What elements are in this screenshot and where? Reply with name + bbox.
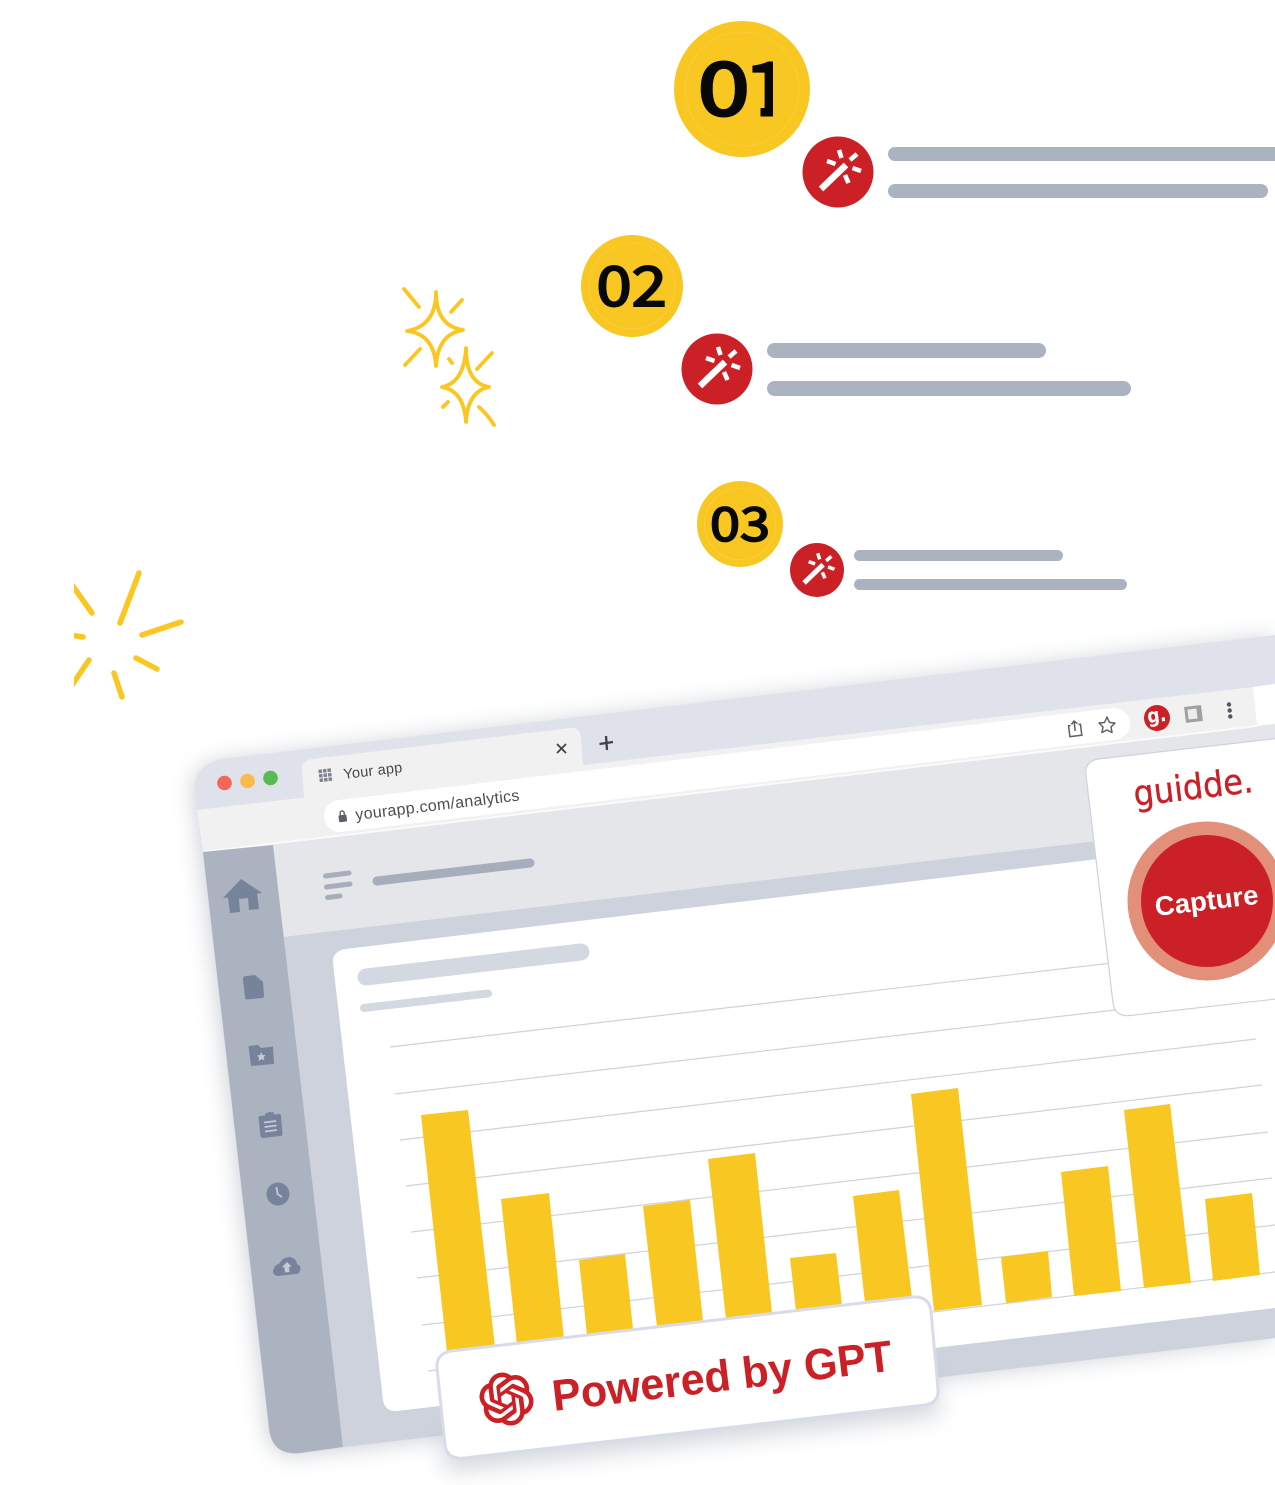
icon: clipboard: [258, 1112, 282, 1138]
icon: cloud upload: [273, 1257, 301, 1276]
active tab: [302, 728, 583, 798]
capture button: [1128, 822, 1275, 980]
icon: clock: [266, 1182, 290, 1206]
icon: bookmark star: [1099, 717, 1115, 732]
sidebar: [203, 845, 343, 1453]
capture button: Capture: [1153, 880, 1260, 922]
text placeholder lines 02: [767, 343, 1131, 396]
guidde logo: guidde.: [1131, 761, 1255, 815]
icon: menu dots: [1227, 702, 1233, 719]
icon: magic wand 03: [790, 543, 844, 597]
number badge 03: [697, 481, 783, 567]
text placeholder lines 01: [888, 147, 1275, 198]
icon: new tab plus: [600, 736, 613, 750]
number badge 03: 03: [710, 486, 770, 555]
address bar: [340, 724, 1114, 816]
browser window: [193, 635, 1275, 1455]
card subtitle placeholder: [364, 994, 488, 1008]
tab title: Your app: [343, 760, 403, 783]
powered by GPT badge: [437, 1297, 940, 1472]
number badge 02: [581, 235, 683, 337]
icon: guidde extension: g.: [1146, 702, 1167, 728]
text placeholder lines 03: [854, 550, 1127, 590]
icon: document: [243, 975, 264, 1000]
browser toolbar: [197, 684, 1275, 852]
url text: yourapp.com/analytics: [354, 788, 520, 824]
badge label: Powered by GPT: [549, 1332, 895, 1421]
icon: side panel: [1184, 705, 1203, 723]
number badge 01: 01: [698, 31, 795, 137]
icon: magic wand 02: [682, 334, 752, 404]
icon: close tab: [557, 744, 566, 753]
chart card: [333, 838, 1275, 1411]
app header: [203, 724, 1275, 937]
icon: share: [1068, 720, 1082, 737]
bar chart: [390, 963, 1275, 1371]
card title placeholder: [366, 952, 581, 977]
step 03: [697, 481, 1127, 597]
number badge 01: [674, 21, 810, 157]
header title placeholder: [377, 863, 530, 881]
icon: lock: [338, 811, 347, 822]
icon: OpenAI logo: [477, 1370, 536, 1428]
traffic light buttons: [217, 771, 278, 790]
guidde capture panel: [1086, 738, 1275, 1016]
icon: home: [223, 879, 262, 913]
step 01: [674, 21, 1275, 208]
content background: [283, 820, 1275, 1447]
icon: tab grid: [318, 768, 332, 782]
icon: favourite folder: [248, 1045, 274, 1066]
icon: yellow sparkles: [404, 289, 494, 425]
icon: yellow burst: [70, 573, 181, 697]
step 02: [581, 235, 1131, 404]
icon: hamburger menu: [326, 873, 350, 898]
icon: magic wand 01: [802, 136, 874, 208]
number badge 02: 02: [596, 243, 667, 323]
